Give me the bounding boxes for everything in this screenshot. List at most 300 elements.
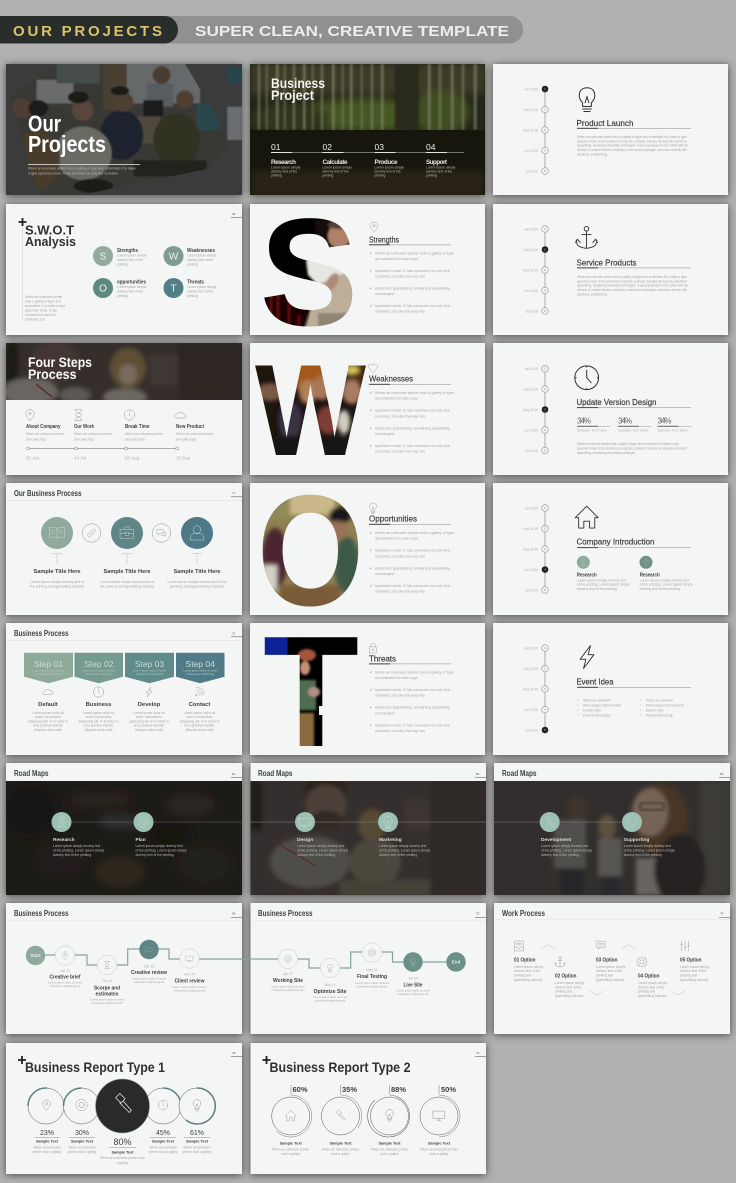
checklist: ✓ — [370, 549, 372, 553]
checklist: unchanged — [375, 432, 394, 436]
ring 60 percent: 60% — [292, 1085, 308, 1094]
option four: printing and — [638, 990, 655, 994]
checklist: specimen book. It has survived not only five — [375, 723, 450, 727]
option two: Lorem ipsum simply — [555, 981, 585, 985]
icon: heart — [368, 364, 378, 373]
flow: end node — [446, 952, 466, 972]
checklist: and scrambled it to make a type — [375, 397, 418, 401]
step banners: consectetur adipiscing — [35, 672, 63, 676]
timeline: 4 — [544, 708, 546, 712]
step banners: consectetur adipiscing — [136, 672, 164, 676]
column business: adipiscing elit. In in tortor in — [79, 720, 119, 724]
timeline: 5 — [544, 309, 546, 313]
checklist: ✓ — [370, 670, 372, 674]
timeline: 3 — [544, 268, 546, 272]
ring 50 percent — [420, 1085, 460, 1156]
letter O photo — [262, 494, 358, 606]
header banner: OUR PROJECTS — [13, 23, 162, 40]
flow: final testing: May 31 — [366, 968, 378, 972]
flow: live site — [396, 952, 430, 996]
page number: 79 — [720, 912, 724, 916]
swot: threats: Threats — [187, 280, 204, 286]
research block two: of the printing. Lorem ipsum simply — [640, 583, 693, 587]
heading: Product Launch — [576, 118, 634, 128]
bullet list left: Web Design Improvement — [583, 704, 621, 708]
swot: opportunities — [93, 278, 147, 298]
ring 30 percent: When an unknown — [68, 1146, 96, 1150]
checklist: unchanged — [375, 572, 394, 576]
timeline: 1 — [544, 646, 546, 650]
steps row: printing — [322, 174, 333, 178]
forest photo — [250, 64, 485, 198]
flow: client review: Mar 24 — [184, 972, 195, 976]
flow: start node: Start — [30, 953, 41, 958]
body text: typesetting, remaining essentially unchanged. It was popularised in the 1960s with the — [577, 284, 688, 288]
column two — [100, 554, 154, 588]
checklist: specimen book. It has survived not only five — [375, 304, 450, 308]
ring 35 percent: 35% — [342, 1085, 357, 1094]
panel: our projects cover — [0, 60, 245, 200]
icon: house — [575, 506, 598, 528]
milestone: development: Development — [541, 837, 572, 843]
checklist: centuries, but also the leap into — [375, 729, 425, 733]
flow: creative review: consetetur adipiscing elit — [134, 980, 165, 984]
step: new product: New Product — [176, 424, 204, 430]
checklist: electronic typesetting, remaining essentially — [375, 566, 450, 570]
panel: product launch — [493, 64, 728, 195]
ring 35 percent: Sample Text — [329, 1142, 352, 1146]
timeline: Jul 2016 — [525, 728, 538, 732]
swot: opportunities: Lorem ipsum simply — [117, 285, 147, 289]
timeline — [523, 645, 548, 733]
header banner — [0, 16, 523, 44]
title — [28, 354, 92, 382]
dated timeline: 01 Jun — [26, 456, 40, 460]
flow: working site: Lorem ipsum dolor sit amet — [271, 984, 305, 988]
stat one: 34% — [577, 416, 591, 426]
option two: dummy text of the — [555, 986, 581, 990]
bullet list left: When an unknown — [583, 698, 610, 702]
body text: typesetting, remaining essentially unchanged. It was popularised in the 1960s with the — [577, 144, 688, 148]
body text: specimen book. It has survived not only five centuries, but also the leap into electronic — [577, 139, 687, 143]
column contact — [180, 688, 220, 732]
step banners: Step 02 — [84, 659, 114, 669]
option one: typesetting industry — [514, 978, 543, 982]
checklist: ✓ — [370, 391, 372, 395]
timeline: 4 — [544, 428, 546, 432]
timeline: 3 — [544, 128, 546, 132]
body text: typesetting, remaining essentially unchanged — [577, 451, 635, 455]
icon: bolt — [580, 646, 594, 668]
ring 23 percent: printer took a galley — [33, 1150, 62, 1154]
research block two: dummy text of the printing — [640, 587, 680, 591]
column develop: adipiscing elit. In in tortor in — [129, 720, 169, 724]
heading: Threats — [369, 653, 396, 663]
heading: Work Process — [502, 909, 545, 918]
page number: 76 — [476, 1051, 480, 1055]
column default: Default — [38, 702, 58, 708]
option three: dummy text of the — [596, 969, 622, 973]
steps row: dummy text of the — [271, 170, 297, 174]
timeline: 3 — [544, 687, 546, 691]
checklist: ✓ — [370, 444, 372, 448]
flow: scope and estimates: estimates — [96, 992, 119, 998]
flow: optimize site: consetetur adipiscing elit — [315, 998, 346, 1002]
title: Business Report Type 2 — [270, 1059, 411, 1075]
cover rule and caption: a type specimen book. It has survived not only five centuries — [28, 172, 118, 176]
step: new product — [175, 412, 215, 442]
ring 60 percent — [272, 1085, 312, 1156]
ring 45 percent: 45% — [156, 1130, 170, 1137]
left rule and note: scrambled it to make a type — [25, 304, 65, 308]
letter T photo — [264, 637, 358, 746]
step banners: Step 03 — [135, 659, 164, 669]
ring 88 percent: took a galley — [380, 1152, 399, 1156]
page number: 69 — [232, 912, 236, 916]
steps row: printing — [374, 174, 385, 178]
swot: weaknesses: printing — [187, 262, 198, 266]
flow: final testing: Lorem ipsum dolor sit amet — [355, 981, 389, 985]
flow: working site: Working Site — [273, 978, 303, 984]
stat three — [658, 416, 692, 432]
panel: road maps one — [5, 763, 242, 895]
timeline: Jan 2015 — [524, 646, 538, 650]
checklist: centuries, but also the leap into — [375, 554, 425, 558]
research block one — [577, 556, 630, 591]
panel: road maps two — [250, 763, 486, 896]
step: our work: took a galley of type — [74, 438, 94, 442]
body text — [577, 275, 688, 296]
body text: When an unknown printer took a galley of type and scrambled it to make a type — [577, 275, 687, 279]
checklist: ✓ — [370, 409, 372, 413]
column business: Aliquam dolor nulla — [84, 728, 113, 732]
checklist: electronic typesetting, remaining essentially — [375, 286, 450, 290]
step: new product: took a galley of type — [176, 438, 196, 442]
panel: four steps process — [2, 342, 242, 475]
icon: bulb — [370, 503, 376, 514]
option three — [596, 941, 626, 982]
column three: printing and typesetting industry — [170, 584, 224, 588]
ring 88 percent — [368, 1085, 410, 1156]
ring 61 percent: Sample Text — [186, 1140, 209, 1144]
title: S.W.O.T — [25, 222, 74, 238]
swot: threats — [164, 278, 217, 298]
body text: When an unknown printer took a galley of type and scrambled it to make a type — [577, 135, 687, 139]
option one: 01 Option — [514, 958, 536, 964]
flow: client review: Client review — [174, 978, 205, 984]
column default — [28, 689, 68, 732]
steps row: Research — [271, 159, 296, 166]
flow: optimize site — [313, 958, 347, 1002]
flow: optimize site: Lorem ipsum dolor sit amet — [313, 995, 347, 999]
checklist: and scrambled it to make a type — [375, 537, 418, 541]
timeline: 5 — [544, 728, 546, 732]
ring 30 percent: 30% — [75, 1130, 89, 1137]
checklist — [370, 252, 454, 314]
milestone: marketing: Lorem ipsum simply dummy text — [379, 844, 426, 848]
timeline: Jan 2015 — [524, 506, 538, 510]
plus mark — [18, 218, 26, 226]
page number — [231, 632, 242, 637]
column three — [168, 554, 227, 588]
milestone: supporting: dummy text of the printing. — [624, 853, 663, 857]
body text: desktop publishing — [577, 152, 607, 156]
flow: end node: End — [452, 960, 461, 964]
body text: specimen book. It has survived not only five centuries, but also the leap into electronic — [577, 279, 687, 283]
title: Four Steps — [28, 354, 92, 370]
letter S photo — [264, 218, 352, 326]
title — [28, 110, 106, 157]
swot: threats: T — [170, 284, 177, 294]
flow: final testing — [355, 943, 389, 988]
timeline: 2 — [544, 108, 546, 112]
body text: specimen book. It has survived not only five centuries, but also the leap into electronic — [577, 446, 687, 450]
milestone: supporting: of the printing. Lorem ipsum simply — [624, 848, 675, 852]
step banners: Lorem ipsum dolor sit amet — [82, 668, 116, 672]
body text: release of Letraset sheets containing Lorem Ipsum passages, and more recently with — [577, 288, 687, 292]
ring 45 percent — [145, 1088, 181, 1154]
page number — [719, 912, 730, 918]
step banners: Step 04 — [186, 659, 215, 669]
steps row: Lorem ipsum simply — [426, 166, 456, 170]
body text — [577, 442, 687, 455]
bullet list right: Events Type — [646, 708, 664, 712]
column one — [30, 554, 84, 588]
bullet list left: Powerpoint Design — [583, 714, 611, 718]
body text: release of Letraset sheets containing Lorem Ipsum passages, and more recently with — [577, 148, 687, 152]
swot: strengths: S — [100, 252, 107, 262]
dim team photo — [250, 778, 486, 896]
option three: typesetting industry — [596, 978, 625, 982]
step banners: Lorem ipsum dolor sit amet — [183, 668, 217, 672]
panel: threats — [250, 623, 485, 755]
bullet list left: Events Type — [583, 708, 601, 712]
column one: the printing and typesetting industry — [30, 584, 84, 588]
heading rule — [577, 407, 691, 408]
ring 80 percent: 80% — [113, 1137, 132, 1147]
flow: optimize site: Optimize Site — [314, 989, 347, 995]
flow: creative brief: Lorem ipsum dolor sit amet — [48, 980, 82, 984]
milestone: marketing: of the printing. Lorem ipsum simply — [379, 848, 430, 852]
swot: strengths: Strengths — [117, 248, 138, 254]
column contact: Lorem ipsum dolor sit — [184, 711, 215, 715]
ring 35 percent: took a galley — [331, 1152, 350, 1156]
column default: Lorem ipsum dolor sit — [32, 711, 64, 715]
checklist: ✓ — [370, 723, 372, 727]
column two: Lorem ipsum simply dummy text of — [100, 580, 154, 584]
ring 80 percent: When an unknown printer took — [100, 1156, 145, 1160]
option five — [680, 941, 710, 982]
steps row: Support — [426, 159, 448, 166]
step: new product: When an unknown printer — [176, 432, 215, 436]
timeline: 2 — [544, 667, 546, 671]
timeline: 1 — [544, 87, 546, 91]
page number: 78 — [232, 1051, 236, 1055]
plus mark — [262, 1056, 270, 1064]
milestone: plan: Plan — [136, 837, 146, 843]
steps row: Lorem ipsum simply — [374, 166, 404, 170]
timeline: Jul 2016 — [525, 170, 538, 174]
flow: scope and estimates: Scorpe and — [94, 986, 120, 992]
checklist: ✓ — [370, 304, 372, 308]
stepped process line — [45, 949, 446, 968]
flow: creative brief: Creative brief — [50, 974, 81, 980]
timeline: Jun 2016 — [524, 289, 538, 293]
flow: live site: Live Site — [404, 982, 423, 988]
header rule — [7, 919, 242, 922]
flow: final testing: Final Testing — [357, 974, 387, 980]
steps row: 02 — [322, 142, 332, 152]
ring 23 percent: When an unknown — [33, 1146, 61, 1150]
flow: optimize site: May 14 — [324, 983, 336, 987]
heading: Service Products — [576, 258, 636, 268]
bullet list right: Powerpoint Design — [646, 714, 674, 718]
step banners: Lorem ipsum dolor sit amet — [32, 668, 66, 672]
option three: Lorem ipsum simply — [596, 965, 626, 969]
milestone: marketing: dummy text of the printing. — [379, 853, 418, 857]
step: about company: About Company — [26, 424, 61, 430]
column contact: amet, consectetur — [186, 715, 213, 719]
flow: scope and estimates — [90, 955, 124, 1005]
flow: scope and estimates: consetetur adipiscing elit — [92, 1001, 123, 1005]
page number — [475, 1051, 486, 1057]
steps row — [271, 142, 464, 178]
milestone: design — [295, 812, 348, 857]
milestone: plan — [134, 812, 187, 857]
panel: business process flow end — [250, 903, 486, 1034]
heading: Company Introduction — [576, 537, 655, 547]
step: our work: Our Work — [74, 424, 94, 430]
stat three: Sample Text here — [658, 428, 688, 432]
heading: Business Process — [258, 909, 313, 918]
step: about company: took a galley of type — [26, 438, 46, 442]
swot: threats: printing — [187, 294, 198, 298]
column contact: adipiscing elit. In in tortor in — [180, 720, 220, 724]
left rule and note: took a galley of type and — [25, 300, 61, 304]
timeline: 3 — [544, 547, 546, 551]
checklist: ✓ — [370, 269, 372, 273]
checklist: specimen book. It has survived not only five — [375, 269, 450, 273]
option one — [514, 941, 544, 982]
step: our work: When an unknown printer — [74, 432, 113, 436]
letter W photo — [255, 366, 366, 455]
timeline: May 2016 — [523, 128, 538, 132]
swot: threats: Lorem ipsum simply — [187, 285, 217, 289]
option three: 03 Option — [596, 958, 618, 964]
page number — [231, 912, 242, 918]
flow: creative review: Lorem ipsum dolor sit amet — [132, 976, 166, 980]
flow: creative brief: Jan 22 — [60, 969, 70, 973]
steps row: dummy text of the — [426, 170, 452, 174]
stat three: 34% — [658, 416, 672, 426]
heading: Our Business Process — [14, 489, 82, 498]
panel: road maps three — [494, 763, 730, 906]
timeline: 1 — [544, 227, 546, 231]
timeline: 4 — [544, 148, 546, 152]
flow: creative review — [131, 940, 168, 984]
flow: start node — [26, 946, 45, 965]
checklist: ✓ — [370, 252, 372, 256]
ring 88 percent: 88% — [391, 1085, 406, 1094]
ring 50 percent: When an unknown printer — [420, 1148, 459, 1152]
timeline: 4 — [544, 288, 546, 292]
flow: live site: consetetur adipiscing elit — [398, 992, 429, 996]
option five: 05 Option — [680, 958, 702, 964]
stat two: 34% — [618, 416, 632, 426]
header rule — [7, 639, 242, 642]
research block one: Research — [577, 572, 597, 578]
icon: clock — [575, 366, 599, 390]
step: break time — [124, 410, 164, 442]
option four: 04 Option — [638, 974, 660, 980]
left rule and note: When an unknown printer — [25, 295, 63, 299]
milestone: research: dummy text of the printing. — [53, 853, 92, 857]
swot: weaknesses: Lorem ipsum simply — [187, 254, 217, 258]
timeline: 2 — [544, 387, 546, 391]
panel: work process — [494, 903, 730, 1034]
option two — [555, 956, 585, 998]
checklist: ✓ — [370, 531, 372, 535]
icon: bulb — [579, 88, 595, 112]
swot: strengths: Lorem ipsum simply — [117, 254, 147, 258]
steps row: Produce — [374, 159, 398, 166]
checklist: specimen book. It has survived not only five — [375, 688, 450, 692]
timeline: Sep 2016 — [523, 248, 538, 252]
connector chevrons — [542, 944, 685, 995]
timeline: 1 — [544, 367, 546, 371]
swot: threats: dummy text of the — [187, 290, 213, 294]
timeline: Jul 2016 — [525, 310, 538, 314]
stat one — [577, 416, 610, 432]
panel: opportunities — [250, 483, 485, 615]
flow: working site — [271, 949, 305, 992]
swot: weaknesses — [164, 246, 217, 266]
body text: desktop publishing — [577, 292, 607, 296]
heading: Strengths — [369, 234, 399, 244]
milestone: research: Lorem ipsum simply dummy text — [53, 844, 100, 848]
swot: opportunities: opportunities — [117, 280, 146, 286]
body text: When an unknown printer took a galley of type and scrambled it to make a type — [577, 442, 679, 446]
heading rule — [369, 244, 451, 245]
title — [271, 75, 325, 103]
timeline: 3 — [544, 408, 546, 412]
flow: scope and estimates: Lorem ipsum dolor sit amet — [90, 998, 124, 1002]
checklist: electronic typesetting, remaining essentially — [375, 706, 450, 710]
heading: Event Idea — [576, 677, 614, 687]
timeline — [523, 86, 548, 174]
checklist: When an unknown printer took a galley of type — [375, 252, 454, 256]
dated timeline — [26, 447, 191, 460]
flow: scope and estimates: Feb 31 — [102, 979, 112, 983]
checklist: unchanged — [375, 711, 394, 715]
step: break time: took a galley of type — [125, 438, 145, 442]
step: about company — [26, 410, 65, 442]
column two: the printing and typesetting industry — [100, 584, 154, 588]
checklist: specimen book. It has survived not only five — [375, 409, 450, 413]
flow: client review — [173, 949, 207, 992]
swot: opportunities: printing — [117, 294, 128, 298]
swot: weaknesses: dummy text of the — [187, 258, 213, 262]
icon: lock — [370, 643, 376, 653]
timeline: Sep 2016 — [523, 388, 538, 392]
checklist: specimen book. It has survived not only five — [375, 584, 450, 588]
checklist: centuries, but also the leap into — [375, 590, 425, 594]
ring 45 percent: When an unknown — [149, 1146, 177, 1150]
column three: Sample Title Here — [174, 569, 220, 575]
column one: Sample Title Here — [34, 569, 80, 575]
milestone: research: of the printing. Lorem ipsum simply — [53, 848, 104, 852]
heading rule — [577, 267, 691, 268]
